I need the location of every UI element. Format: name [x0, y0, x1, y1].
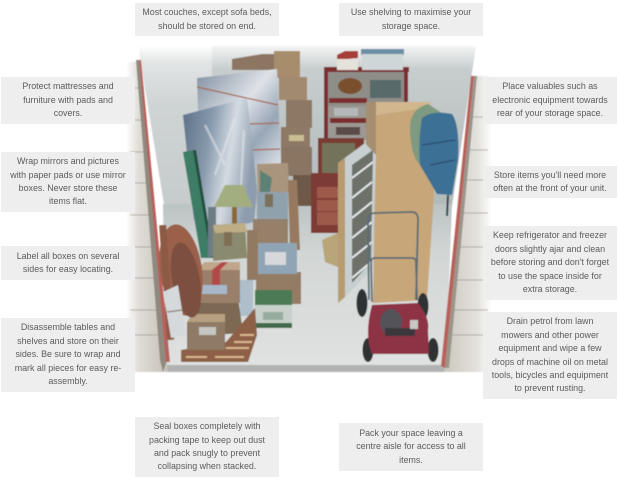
tall stack of boxes in middle	[240, 192, 301, 316]
tip: couches	[135, 3, 279, 36]
tip: centre aisle: items.	[399, 455, 423, 465]
tip: lawn mowers: Drain petrol from lawn	[507, 316, 593, 326]
tip: valuables	[483, 77, 617, 124]
wrapped sofa	[183, 98, 257, 232]
tip: seal boxes	[135, 417, 279, 477]
tip: refrigerator: Keep refrigerator and freezer	[493, 230, 607, 240]
green lidded box	[255, 290, 292, 328]
tip: mattresses: furniture with pads and	[23, 95, 113, 105]
tip: seal boxes: and pack snugly to prevent	[154, 448, 260, 458]
wooden pallet	[181, 308, 257, 362]
tip: seal boxes: Seal boxes completely with	[153, 421, 261, 431]
tip: refrigerator: before storing and don't forget	[491, 257, 609, 267]
refrigerator body	[366, 102, 434, 303]
round mirror in brown padding	[154, 222, 208, 340]
back and side walls of unit	[138, 46, 476, 372]
tip: shelving	[339, 3, 483, 36]
tip: centre aisle	[339, 423, 483, 471]
white wrapped table legs	[163, 285, 186, 338]
tip: labels: sides for easy locating.	[23, 264, 113, 274]
tip: couches: Most couches, except sofa beds,	[142, 7, 272, 17]
lawn mower wheels	[356, 289, 438, 362]
tip: shelving: storage space.	[382, 20, 440, 30]
tip: centre aisle: centre aisle for access to all	[356, 441, 466, 451]
red shelving unit	[324, 67, 409, 140]
tip: lawn mowers: tools, bicycles and equipment	[492, 370, 608, 380]
tip: mirrors: items flat.	[49, 196, 87, 206]
tip: refrigerator: extra storage.	[523, 284, 577, 294]
tip: lawn mowers: mowers and other power	[501, 330, 599, 340]
tip: refrigerator	[483, 226, 617, 300]
tip: mirrors: boxes. Never store these	[19, 183, 117, 193]
tip: mirrors	[1, 152, 135, 212]
tip: mirrors: with paper pads or use mirror	[10, 170, 126, 180]
tip: mattresses: covers.	[54, 108, 82, 118]
tip: disassemble: assembly.	[48, 376, 88, 386]
wrapped mirror frame in green	[183, 150, 216, 258]
items on top of shelf	[337, 49, 404, 70]
tip: shelving: Use shelving to maximise your	[351, 7, 471, 17]
red dresser	[311, 173, 339, 233]
tip: centre aisle: Pack your space leaving a	[359, 428, 463, 438]
front box on pallet	[187, 314, 225, 350]
right brick wall	[441, 76, 492, 372]
small monitor	[318, 138, 364, 178]
wrapped mattress	[197, 69, 281, 172]
tip: refrigerator: doors slightly ajar and clean	[495, 244, 605, 254]
tip: valuables: rear of your storage space.	[497, 108, 603, 118]
lawn mower handle	[368, 212, 418, 302]
green and blue padded bags	[410, 104, 458, 216]
tip: disassemble	[1, 318, 135, 392]
tip: front of unit	[483, 166, 617, 198]
tip: mattresses	[1, 77, 135, 124]
tip: disassemble: Disassemble tables and	[21, 322, 115, 332]
tip: couches: should be stored on end.	[158, 20, 256, 30]
tip: valuables: Place valuables such as	[502, 81, 598, 91]
tip: lawn mowers: equipment and wipe a few	[498, 343, 602, 353]
gift package	[322, 233, 338, 267]
tip: disassemble: mark all pieces for easy re-	[15, 363, 121, 373]
tip: labels	[1, 246, 135, 280]
lawn mower deck and engine	[368, 303, 429, 354]
tip: disassemble: shelves and store on their	[17, 336, 119, 346]
tip: seal boxes: collapsing when stacked.	[158, 461, 256, 471]
tip: front of unit: often at the front of your unit.	[493, 183, 607, 193]
tip: valuables: electronic equipment towards	[492, 95, 608, 105]
open refrigerator door with shelves	[338, 143, 376, 303]
tip: mirrors: Wrap mirrors and pictures	[17, 156, 119, 166]
labelled box stack on pallet	[193, 223, 247, 336]
tip: lawn mowers: drops of machine oil on metal	[492, 356, 608, 366]
wrapped picture and leaning board	[257, 163, 300, 250]
left brick wall	[126, 60, 170, 372]
tip: lawn mowers	[483, 312, 617, 399]
tip: disassemble: sides. Be sure to wrap and	[15, 349, 121, 359]
tip: mattresses: Protect mattresses and	[22, 81, 114, 91]
stacked boxes at rear	[232, 51, 312, 206]
tip: seal boxes: packing tape to keep out dust	[149, 435, 265, 445]
tip: refrigerator: to use the space inside for	[498, 271, 602, 281]
tip: labels: Label all boxes on several	[17, 251, 119, 261]
tip: front of unit: Store items you'll need more	[494, 170, 606, 180]
table lamp	[214, 185, 253, 225]
tip: lawn mowers: to prevent rusting.	[514, 383, 586, 393]
